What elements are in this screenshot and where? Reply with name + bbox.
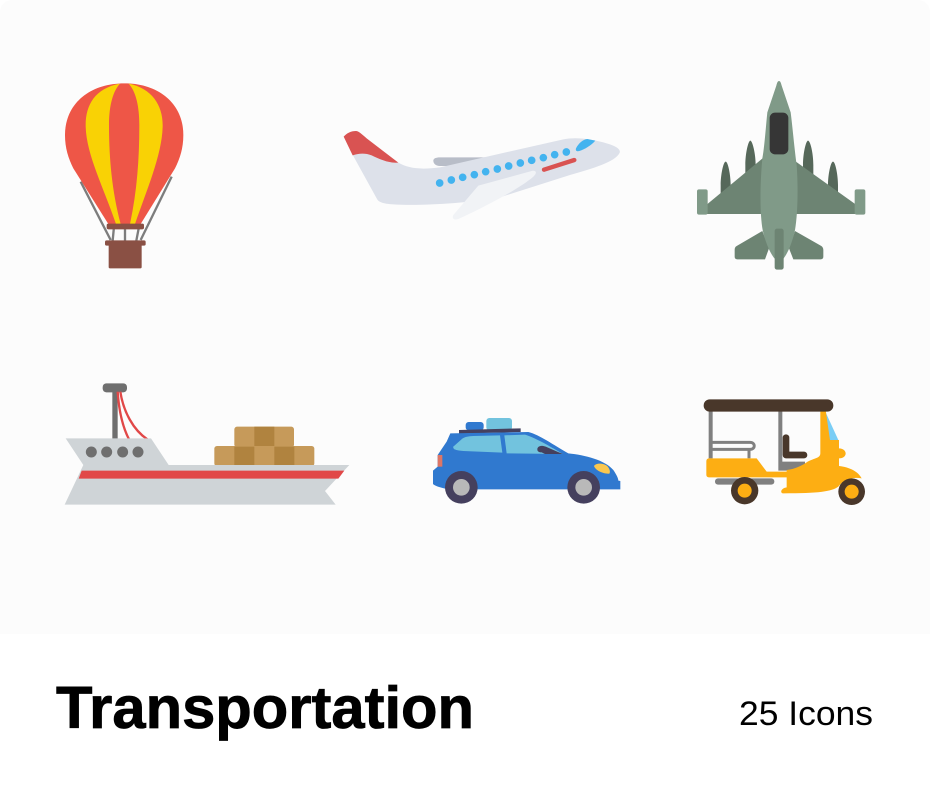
title: Transportation xyxy=(56,675,474,741)
icon: tuk-tuk xyxy=(704,399,865,505)
icon count label: 25 Icons xyxy=(739,695,873,733)
icon: fighter jet xyxy=(697,81,865,270)
icon: blue car xyxy=(433,418,620,504)
icon: passenger airplane xyxy=(344,131,620,220)
icon: cargo ship xyxy=(65,383,349,505)
icon: hot air balloon xyxy=(65,83,183,268)
